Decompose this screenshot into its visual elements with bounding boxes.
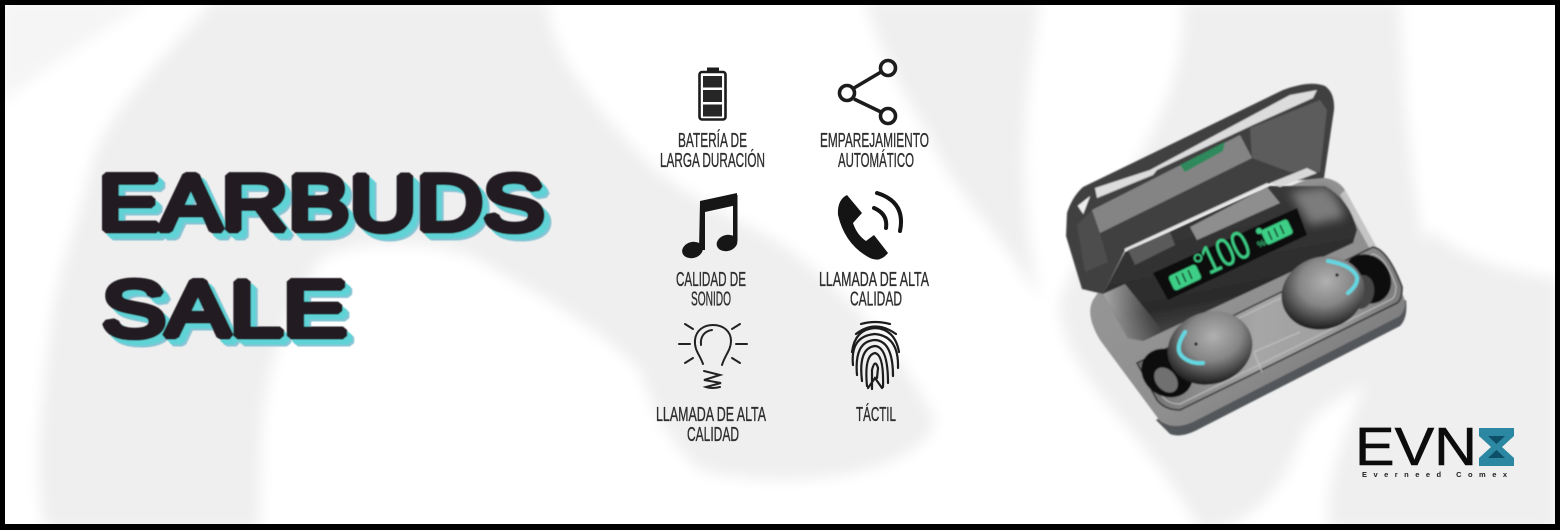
right earbud [1272, 244, 1401, 340]
icon: fingerprint [852, 322, 899, 389]
feature label: bulb: CALIDAD [687, 424, 739, 446]
logo tagline: Everneed Comex [1362, 470, 1508, 479]
feature label: pairing: AUTOMÁTICO [838, 149, 914, 172]
LCD readout: 100 [1194, 223, 1257, 283]
feature label: call quality [819, 269, 929, 310]
LCD readout [1168, 219, 1294, 291]
title line: SALE: SALE [102, 264, 347, 353]
icon: music note [680, 193, 739, 260]
case lid [1066, 84, 1334, 294]
feature label: call quality: LLAMADA DE ALTA [819, 269, 929, 291]
feature label: battery [660, 129, 765, 172]
feature label: pairing [820, 130, 929, 172]
case base [1090, 178, 1406, 435]
feature label: touch: TÁCTIL [856, 403, 896, 426]
logo wordmark: EVN [1355, 417, 1477, 477]
icon: light bulb [679, 324, 747, 388]
title line: SALE: SALE [109, 271, 354, 360]
display block [1103, 186, 1357, 341]
product: earbuds charging case [1066, 84, 1406, 435]
title: EARBUDS SALE [98, 158, 552, 360]
title line: EARBUDS: EARBUDS [106, 165, 552, 254]
feature label: sound quality: CALIDAD DE [676, 269, 746, 291]
feature label: pairing: EMPAREJAMIENTO [820, 130, 929, 152]
title line: EARBUDS: EARBUDS [98, 158, 544, 247]
feature label: battery: BATERÍA DE [678, 129, 747, 152]
icon: share / pairing [840, 60, 896, 124]
logo: EVN Everneed Comex [1355, 417, 1514, 479]
feature label: call quality: CALIDAD [850, 288, 902, 310]
title line: SALE: SALE [107, 269, 352, 358]
feature label: sound quality: SONIDO [691, 288, 731, 310]
title line: EARBUDS: EARBUDS [104, 163, 550, 252]
icon: battery [700, 68, 726, 120]
icon: phone with signal [838, 193, 901, 260]
left earbud [1132, 300, 1262, 407]
feature label: bulb: LLAMADA DE ALTA [656, 404, 766, 426]
feature label: sound quality [676, 269, 746, 310]
logo mark [1479, 428, 1514, 466]
feature label: bulb [656, 404, 766, 446]
feature label: battery: LARGA DURACIÓN [660, 149, 765, 172]
LCD readout: % [1256, 237, 1267, 250]
